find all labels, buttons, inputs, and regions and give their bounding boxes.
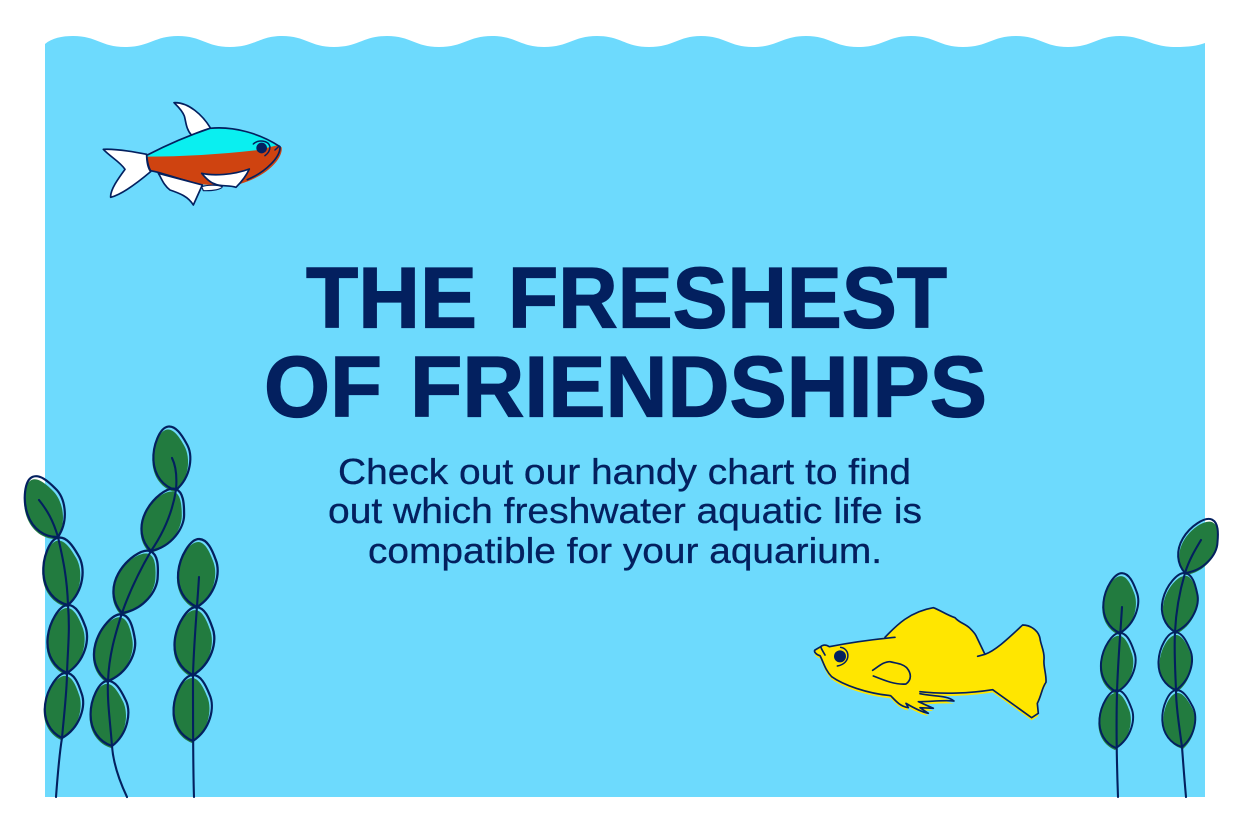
subtitle text: compatible for your aquarium. xyxy=(368,530,882,571)
plant: right inner xyxy=(1098,573,1139,797)
title: THE xyxy=(306,250,477,346)
title: FRIENDSHIPS xyxy=(410,339,987,435)
subtitle text: Check out our handy chart to find xyxy=(338,451,911,492)
plant: second from left xyxy=(87,424,194,797)
neon tetra fish xyxy=(103,103,282,205)
title: OF xyxy=(264,339,382,435)
subtitle text: out which freshwater aquatic life is xyxy=(328,490,922,531)
yellow molly fish xyxy=(815,608,1046,720)
plant: far left xyxy=(14,470,88,797)
subtitle text xyxy=(328,451,922,571)
plant: right outer xyxy=(1158,512,1227,797)
title: FRESHEST xyxy=(508,250,947,346)
plant: third from left xyxy=(172,538,219,797)
title xyxy=(264,250,987,435)
